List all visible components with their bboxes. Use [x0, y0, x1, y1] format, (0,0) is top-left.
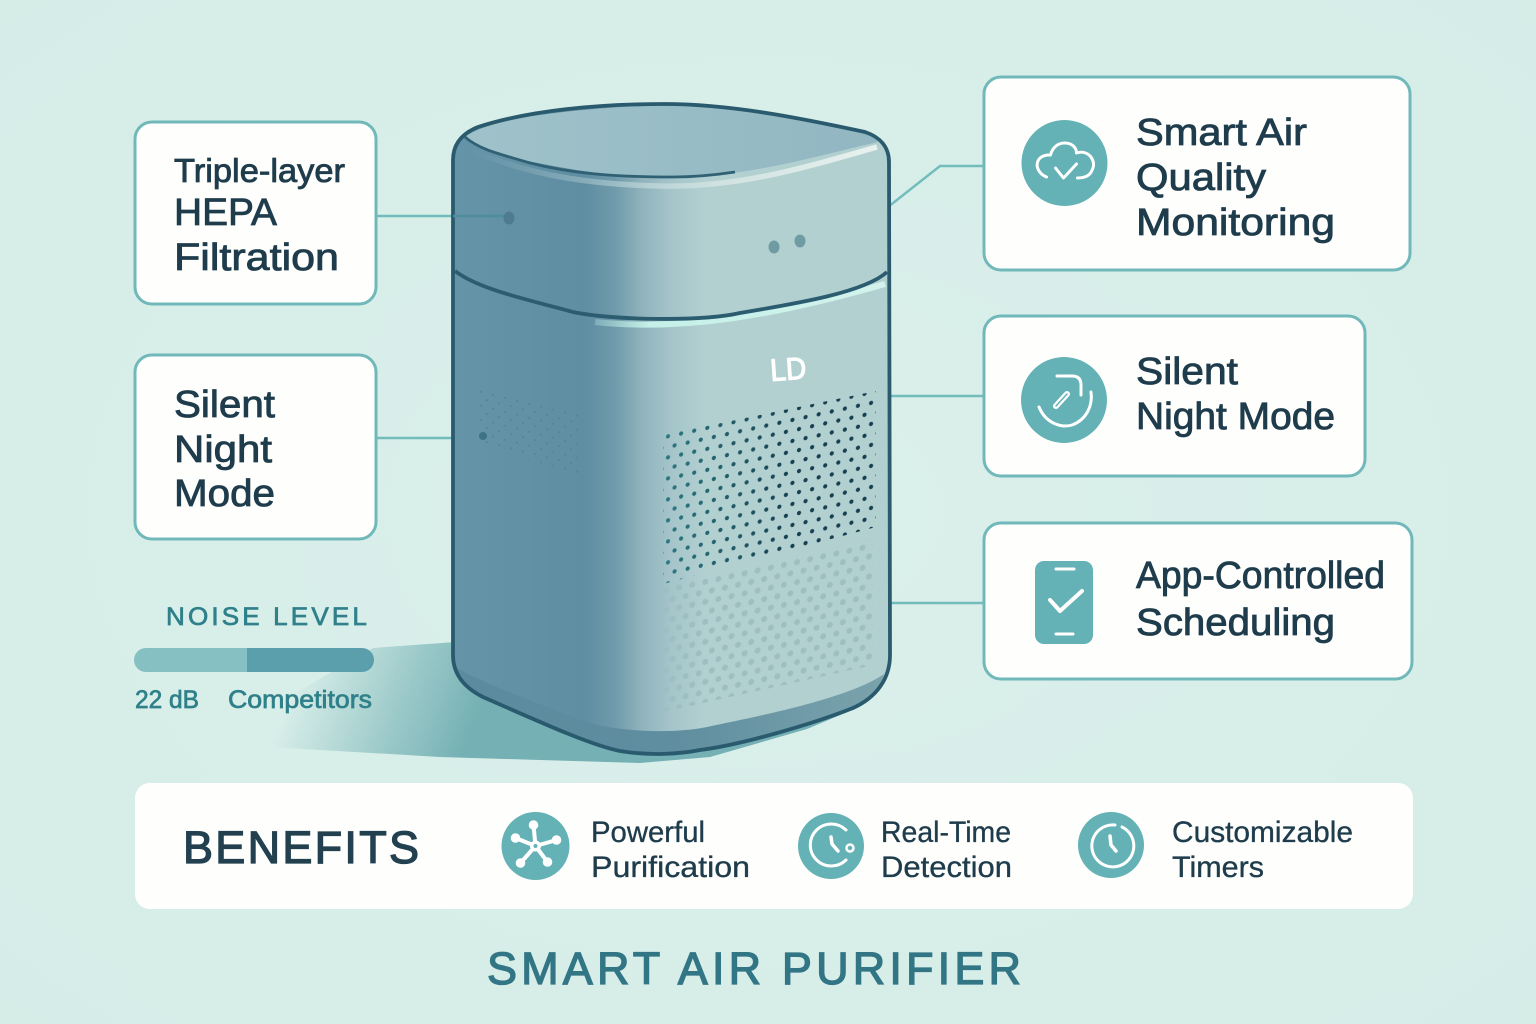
benefit: powerful purification: [502, 812, 750, 884]
noise bar: [134, 648, 374, 672]
text: smart air quality monitoring: Quality: [1136, 157, 1266, 199]
benefit: real-time detection: [798, 813, 1012, 884]
heading: noise level: NOISE LEVEL: [166, 603, 370, 631]
top face: [465, 105, 878, 177]
text: silent night label: Mode: [174, 473, 275, 515]
panel: app-controlled scheduling: [984, 523, 1412, 679]
text: silent night mode: Silent: [1136, 351, 1238, 393]
text: filtration label: [174, 152, 345, 279]
text: silent night label: [174, 384, 275, 515]
text: filtration label: HEPA: [174, 192, 278, 234]
text: filtration label: Triple-layer: [174, 152, 345, 189]
text: powerful purification: Powerful: [591, 816, 705, 849]
text: powerful purification: [591, 816, 750, 884]
text: smart air quality monitoring: [1136, 112, 1335, 244]
text: app-controlled scheduling: [1136, 555, 1385, 644]
text: real-time detection: Real-Time: [881, 816, 1011, 849]
grille: dark perforation: [663, 391, 876, 584]
panel: benefits: [135, 783, 1413, 909]
icon: clock with sensor: [798, 813, 864, 879]
connector: HEPA: [376, 215, 453, 217]
benefit: customizable timers: [1078, 812, 1353, 884]
top face edge: [465, 137, 735, 177]
connector: silent night right: [888, 395, 984, 397]
icon: phone check: [1035, 561, 1093, 644]
grille: light perforation: [670, 538, 873, 709]
label: competitors: Competitors: [228, 686, 372, 714]
base band: [457, 668, 884, 754]
text: customizable timers: Customizable: [1172, 816, 1353, 849]
logo LD: LD: [769, 351, 807, 388]
panel: silent night mode: [135, 355, 376, 539]
text: smart air quality monitoring: Monitoring: [1136, 202, 1335, 244]
top highlight: [472, 147, 877, 186]
heading: benefits: BENEFITS: [183, 822, 419, 873]
icon: cloud check: [1022, 120, 1108, 206]
text: silent night label: Silent: [174, 384, 275, 426]
panel: smart air quality monitoring: [984, 77, 1410, 270]
connector: app scheduling: [888, 602, 984, 604]
text: customizable timers: Timers: [1172, 851, 1264, 884]
sensor dot: [504, 212, 514, 224]
text: app-controlled scheduling: App-Controlled: [1136, 555, 1385, 597]
label: 22 dB: 22 dB: [135, 686, 199, 714]
side vent: [478, 385, 582, 475]
connector: silent night left: [376, 437, 453, 439]
text: real-time detection: Detection: [881, 851, 1012, 884]
outline: [453, 104, 890, 754]
glow strip: [595, 284, 885, 325]
lid seam: [455, 271, 887, 319]
text: app-controlled scheduling: Scheduling: [1136, 602, 1335, 644]
icon: fan: [502, 812, 570, 880]
panel: HEPA filtration: [135, 122, 376, 304]
text: smart air quality monitoring: Smart Air: [1136, 112, 1307, 154]
text: silent night label: Night: [174, 429, 272, 471]
icon: night mode dial: [1021, 357, 1107, 443]
icon: clock: [1078, 812, 1144, 878]
text: customizable timers: [1172, 816, 1353, 884]
indicator dots: [768, 234, 806, 254]
text: silent night mode: [1136, 351, 1335, 438]
side dot: [479, 432, 487, 440]
panel: noise level: [134, 603, 374, 714]
inner line to HEPA dot: [453, 215, 508, 217]
text: real-time detection: [881, 816, 1012, 884]
device shadow: [240, 641, 860, 763]
text: silent night mode: Night Mode: [1136, 396, 1335, 438]
title: SMART AIR PURIFIER: [487, 943, 1021, 994]
purifier body: [453, 104, 890, 754]
panel: silent night mode right: [984, 316, 1365, 476]
connector: air quality: [888, 166, 984, 207]
text: filtration label: Filtration: [174, 237, 339, 279]
text: powerful purification: Purification: [591, 851, 750, 884]
air purifier device: [453, 104, 890, 754]
